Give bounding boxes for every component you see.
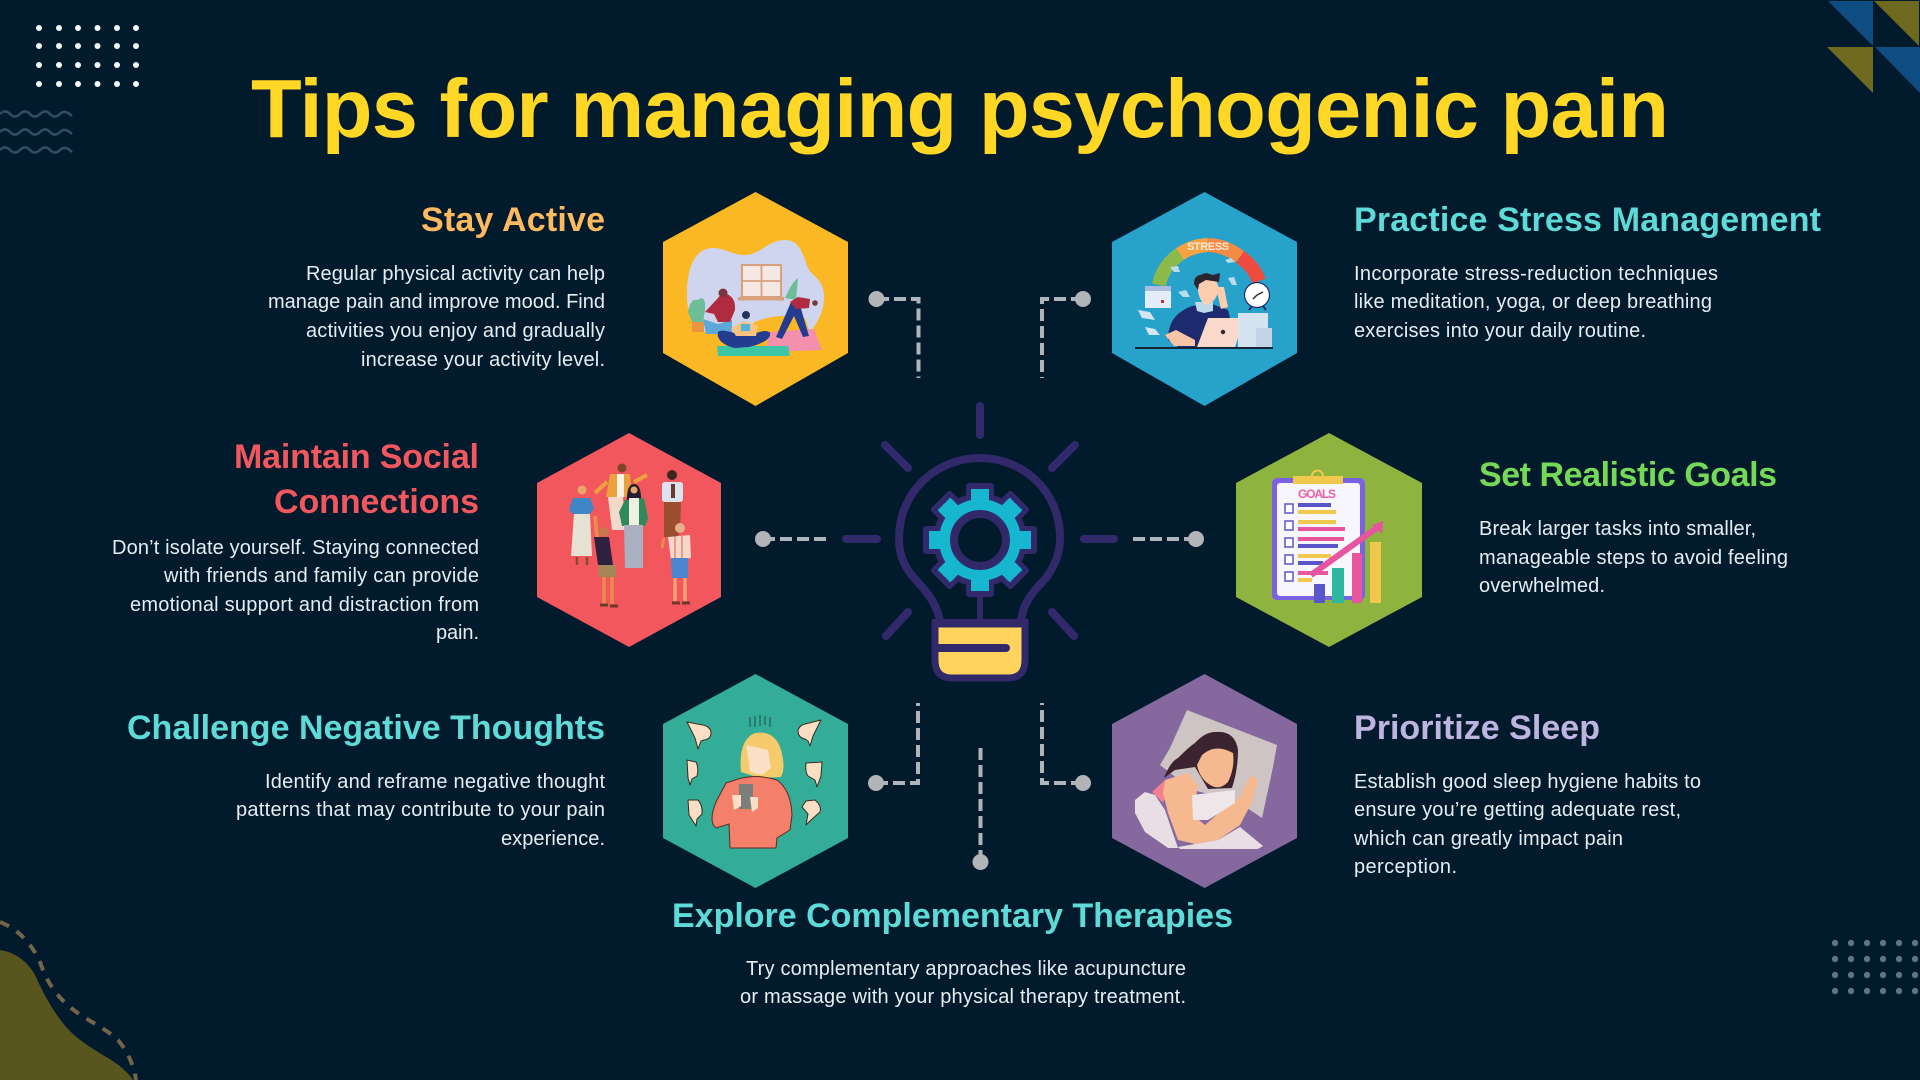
decoration: faded dot grid (1832, 940, 1918, 994)
connector: to social connections (755, 531, 827, 547)
text: realistic goals description: overwhelmed. (1479, 575, 1605, 597)
icon: green hexagon with goals clipboard: GOALS (1298, 487, 1336, 501)
text: stay active description (268, 263, 605, 371)
decoration: bottom-left blob (0, 922, 136, 1080)
icon: teal hexagon with woman and thumbs down (663, 674, 848, 888)
icon: purple hexagon with sleeping woman (1112, 674, 1297, 888)
text: stay active description: manage pain and improve mood. Find (268, 291, 605, 313)
decoration: wavy lines (0, 112, 72, 152)
heading: prioritize sleep: Prioritize Sleep (1354, 709, 1600, 747)
text: social connections description: with friends and family can provide (163, 565, 479, 587)
text: complementary therapies description: or massage with your physical therapy treatment. (740, 986, 1186, 1008)
text: stay active description: activities you enjoy and gradually (306, 320, 605, 342)
text: prioritize sleep description (1353, 771, 1701, 878)
text: stay active description: increase your activity level. (361, 349, 605, 371)
text: negative thoughts description: experience. (501, 828, 605, 850)
text: complementary therapies description: Try complementary approaches like acupuncture (746, 958, 1186, 980)
panel: maintain social connections (112, 433, 721, 647)
heading: maintain social connections (234, 438, 479, 521)
text: realistic goals description (1479, 518, 1788, 597)
panel: challenge negative thoughts (127, 674, 848, 888)
icon: central light bulb with gear (846, 406, 1114, 678)
text: realistic goals description: manageable steps to avoid feeling (1479, 547, 1788, 569)
text: complementary therapies description (740, 958, 1186, 1008)
text: stress management description: like meditation, yoga, or deep breathing (1354, 291, 1712, 313)
panel: stay active (268, 192, 848, 406)
panel: practice stress management (1112, 192, 1821, 406)
text: prioritize sleep description: which can greatly impact pain (1353, 828, 1623, 850)
heading: stay active: Stay Active (421, 201, 605, 239)
text: negative thoughts description (236, 771, 605, 850)
panel: prioritize sleep (1112, 674, 1701, 888)
icon: yellow hexagon with family exercising (663, 192, 848, 406)
text: social connections description: pain. (436, 622, 479, 644)
heading: explore complementary therapies: Explore Complementary Therapies (672, 897, 1233, 935)
heading: set realistic goals: Set Realistic Goals (1479, 456, 1777, 494)
connector: to negative thoughts (868, 703, 918, 791)
connector: to prioritize sleep (1042, 703, 1091, 791)
title: Tips for managing psychogenic pain (251, 62, 1669, 155)
text: stress management description: exercises into your daily routine. (1354, 320, 1646, 342)
heading: maintain social connections: Maintain Social (234, 438, 479, 476)
panel: set realistic goals (1236, 433, 1788, 647)
heading: maintain social connections: Connections (274, 483, 479, 521)
text: prioritize sleep description: ensure you’re getting adequate rest, (1354, 799, 1681, 821)
heading: practice stress management: Practice Stress Management (1354, 201, 1821, 239)
decoration: corner triangles (1827, 1, 1920, 93)
icon: green hexagon with goals clipboard (1236, 433, 1422, 647)
icon: blue hexagon with stressed worker (1112, 192, 1297, 406)
icon: blue hexagon with stressed worker: STRESS (1187, 241, 1229, 253)
text: prioritize sleep description: Establish good sleep hygiene habits to (1354, 771, 1701, 793)
connector: to stay active (868, 291, 918, 378)
text: negative thoughts description: Identify and reframe negative thought (265, 771, 605, 793)
text: social connections description (112, 537, 479, 644)
text: prioritize sleep description: perception. (1354, 856, 1457, 878)
text: stay active description: Regular physical activity can help (306, 263, 605, 285)
decoration: white dot grid (36, 25, 139, 87)
text: negative thoughts description: patterns that may contribute to your pain (236, 799, 605, 821)
text: stress management description: Incorporate stress-reduction techniques (1354, 263, 1718, 285)
connector: to realistic goals (1133, 531, 1204, 547)
text: realistic goals description: Break larger tasks into smaller, (1479, 518, 1756, 540)
panel: explore complementary therapies (672, 897, 1233, 1008)
text: stress management description (1354, 263, 1718, 342)
connector: to complementary therapies (972, 748, 988, 870)
icon: red hexagon with group of friends (537, 433, 721, 647)
text: social connections description: emotional support and distraction from (130, 594, 479, 616)
connector: to stress management (1042, 291, 1091, 378)
text: social connections description: Don’t isolate yourself. Staying connected (112, 537, 479, 559)
heading: challenge negative thoughts: Challenge Negative Thoughts (127, 709, 605, 747)
